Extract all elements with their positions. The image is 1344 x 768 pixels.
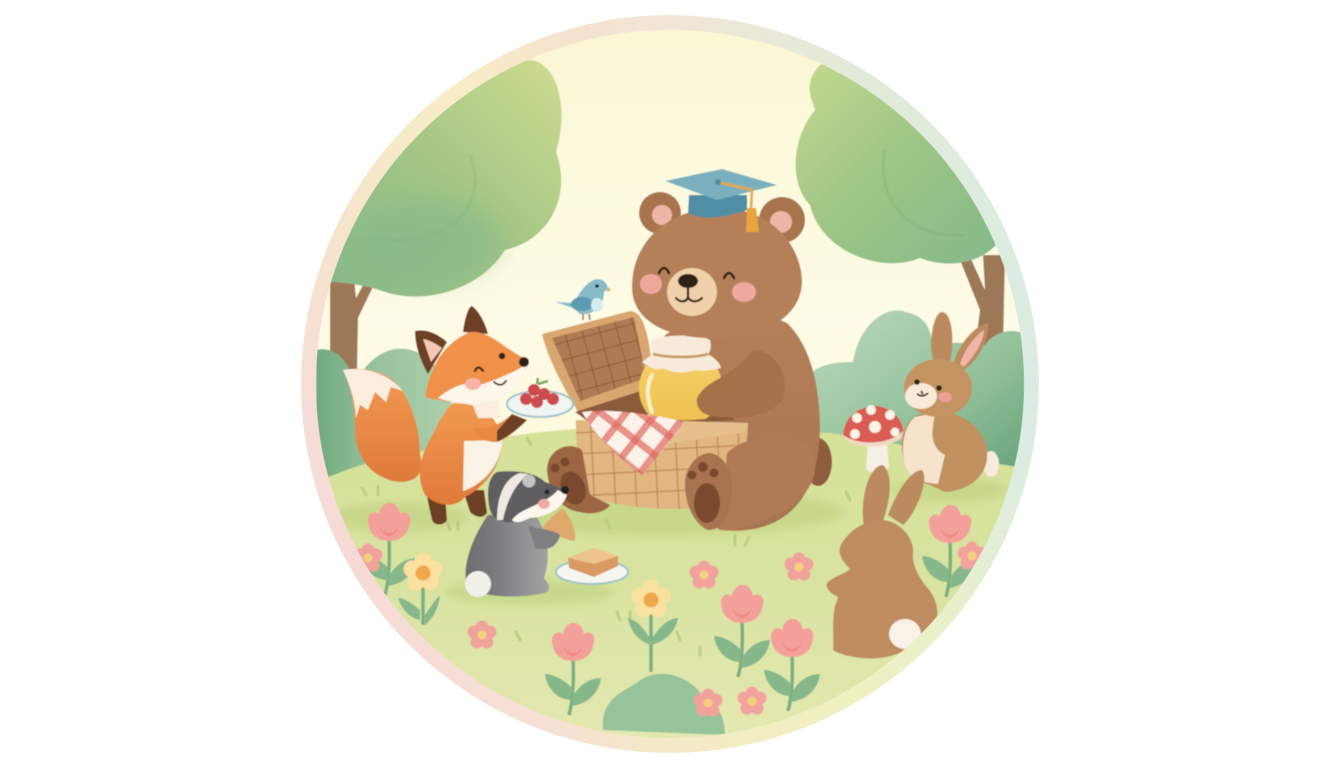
picnic basket (576, 420, 748, 509)
near rabbit from behind (827, 465, 937, 658)
gingham cloth (582, 411, 684, 475)
fox tail (343, 369, 421, 482)
honey jar (639, 336, 722, 420)
circular frame ring (301, 15, 1039, 753)
sky (316, 30, 1020, 436)
bear arm (697, 350, 785, 418)
fox head (425, 332, 528, 403)
fox body (420, 403, 502, 505)
badger (465, 471, 575, 597)
foreground bush (603, 674, 725, 735)
blue bird (555, 279, 611, 320)
graduation cap (665, 169, 777, 232)
basket inner (574, 391, 734, 422)
ground shadows (332, 477, 1008, 605)
right tree (796, 50, 1010, 350)
fox bib (472, 400, 500, 418)
small pink flowers (354, 542, 986, 716)
far rabbit (902, 312, 999, 492)
fox (343, 306, 529, 524)
bear thigh and foot right (685, 436, 815, 530)
plate of berries (507, 378, 573, 417)
left tree (325, 60, 562, 370)
fox legs (427, 490, 487, 524)
illustration: woodland picnic in a circular frame (316, 30, 1024, 738)
bear foot left (547, 446, 610, 513)
background bushes (316, 310, 1030, 490)
tulips (361, 503, 978, 715)
bear head (632, 192, 805, 338)
fox ears (463, 306, 488, 334)
fox arm (473, 414, 527, 442)
ground (300, 428, 1040, 740)
basket lid (542, 311, 655, 412)
scene clipped to circle (300, 20, 1040, 740)
sandwich plate (556, 548, 628, 584)
toast in paw (542, 508, 575, 541)
daisies (398, 552, 678, 672)
bear body (661, 314, 832, 531)
grass tufts (362, 438, 850, 655)
mushroom (843, 405, 903, 473)
